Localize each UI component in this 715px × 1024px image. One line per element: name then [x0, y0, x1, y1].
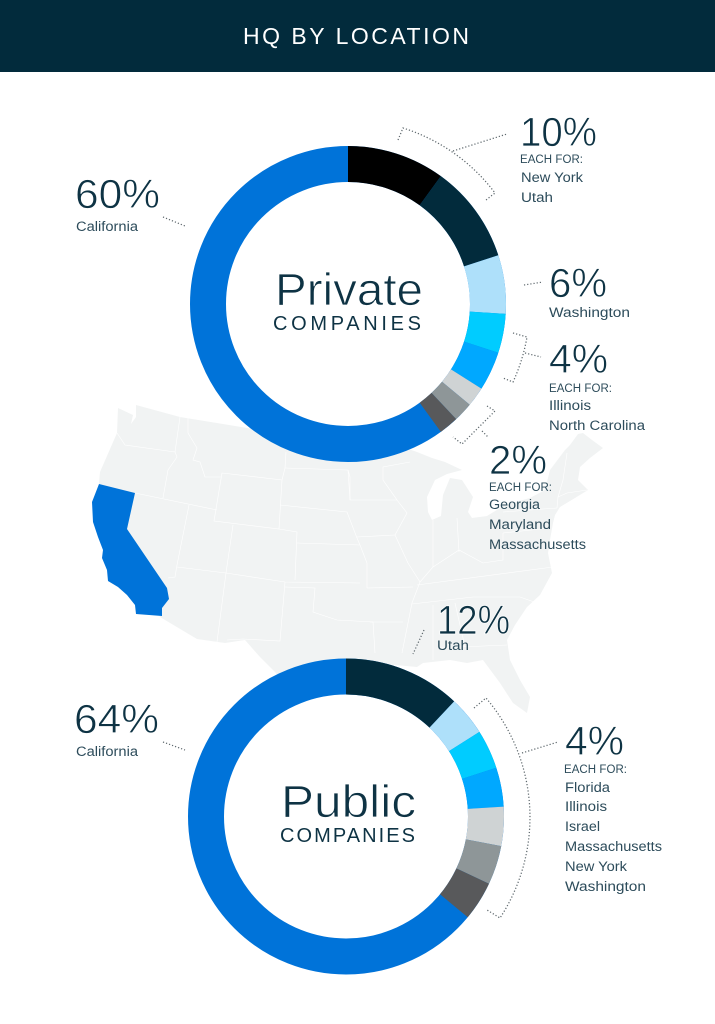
- donut chart: private companies: [208, 164, 488, 444]
- callout: private 2%: 2%: [489, 437, 547, 483]
- callout: public 4%: 4%: [565, 718, 624, 764]
- callout: private 10%: Utah: [521, 190, 553, 205]
- callout: private 2%: Massachusetts: [489, 537, 586, 552]
- callout: private 10%: 10%: [520, 109, 597, 155]
- callout: private 10%: New York: [521, 170, 583, 185]
- callout: public 64% California: 64%: [74, 696, 159, 742]
- callout: public 4%: Israel: [565, 819, 600, 834]
- callout: private 2%: [489, 437, 586, 552]
- callout: private 2%: Georgia: [489, 497, 541, 512]
- leader: private 6%: [524, 282, 543, 285]
- callout: private 4%: 4%: [549, 336, 608, 382]
- donut chart: public companies: [206, 676, 486, 956]
- donut label: public: COMPANIES: [280, 825, 415, 847]
- donut label: public: Public: [281, 776, 416, 827]
- California highlighted: [92, 484, 169, 616]
- callout: public 12%: 12%: [437, 597, 510, 643]
- callout: public 4%: [564, 718, 662, 894]
- bracket: private 4%: [503, 333, 541, 382]
- bracket: private 2%: [453, 406, 495, 444]
- callout: private 6%: Washington: [549, 305, 630, 320]
- donut label: private: [273, 264, 423, 335]
- callout: private 4%: North Carolina: [549, 418, 646, 433]
- bracket: public 4%: [474, 698, 558, 918]
- callout: private 4%: EACH FOR:: [549, 383, 612, 395]
- callout: public 12%: Utah: [437, 638, 469, 653]
- header banner: [0, 0, 715, 72]
- donut label: private: COMPANIES: [273, 313, 421, 335]
- callout: public 4%: Florida: [565, 780, 611, 795]
- callout: private 2%: EACH FOR:: [489, 482, 552, 494]
- callout: private 10%: [520, 109, 597, 205]
- title: HQ BY LOCATION: [243, 23, 469, 49]
- callout: private 2%: Maryland: [489, 517, 551, 532]
- callout leader: private California: [163, 217, 185, 226]
- callout: public 4%: Washington: [565, 879, 646, 894]
- callout: private 4%: Illinois: [549, 398, 591, 413]
- callout: public 64% California: California: [76, 744, 139, 759]
- callout: private 6%: [549, 260, 630, 320]
- callout: public 4%: New York: [565, 859, 627, 874]
- callout: private 6%: 6%: [549, 260, 607, 306]
- callout: private 10%: EACH FOR:: [520, 154, 583, 166]
- callout: public 4%: Illinois: [565, 799, 607, 814]
- callout: public 4%: Massachusetts: [565, 839, 662, 854]
- callout: private 60% California: California: [76, 219, 139, 234]
- callout: private 60% California: 60%: [75, 171, 160, 217]
- callout: private 4%: [549, 336, 646, 433]
- leader: public California: [163, 742, 185, 750]
- donut label: public: [280, 776, 416, 847]
- donut label: private: Private: [275, 264, 423, 315]
- bracket: private 10%: [398, 128, 507, 200]
- lines: state borders: [117, 417, 587, 660]
- map: United States: [92, 405, 603, 713]
- callout: public 4%: EACH FOR:: [564, 764, 627, 776]
- leader: public 12%: [413, 630, 424, 654]
